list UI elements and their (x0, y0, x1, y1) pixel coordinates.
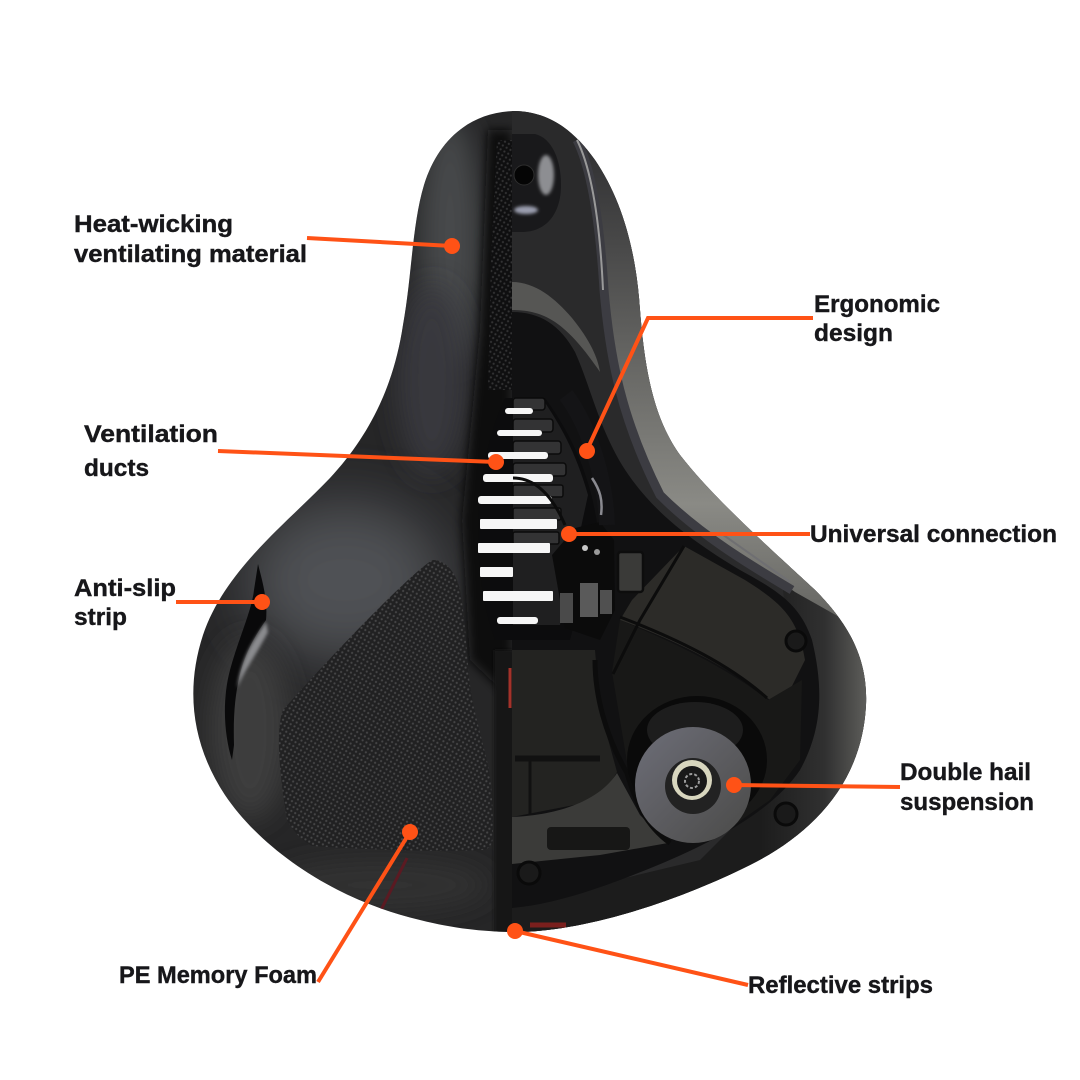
nose screw (514, 165, 534, 185)
nose highlights (514, 155, 554, 214)
callout: Ventilation ducts: ducts (84, 455, 149, 482)
callout: Ergonomic design: design (814, 320, 893, 347)
anti-slip groove (225, 564, 266, 760)
outer lower rim (512, 560, 880, 940)
neck light band (580, 142, 838, 616)
lower dark plate area (770, 686, 792, 700)
upper inner plate (620, 546, 805, 700)
memory foam panel (279, 560, 493, 851)
nut (618, 552, 643, 592)
left plate panel (512, 650, 617, 817)
callout: Double hail suspension: suspension (900, 789, 1034, 816)
callout: PE Memory Foam (119, 824, 418, 989)
callout: Double hail suspension (726, 759, 1034, 816)
ventilation ducts (478, 398, 598, 640)
callout: Anti-slip strip (74, 575, 270, 631)
callout: Universal connection: Universal connection (810, 521, 1057, 548)
left half shading (210, 115, 524, 940)
upper perforated strip (488, 140, 512, 390)
nose window (512, 134, 561, 232)
plate ribs (613, 546, 767, 698)
lower slot (547, 827, 630, 850)
anti-slip highlight (237, 622, 268, 688)
callout: Ergonomic design: Ergonomic (814, 291, 940, 318)
callout: Ventilation ducts: Ventilation (84, 421, 218, 448)
grey brace (512, 773, 668, 864)
seam strip (577, 140, 792, 590)
duct tabs (513, 398, 566, 544)
interior cavity (512, 312, 819, 908)
inner arch (512, 282, 600, 372)
callout: Heat-wicking ventilating material (74, 211, 460, 268)
saddle (193, 100, 880, 940)
callout: Universal connection (561, 521, 1057, 548)
callout: Heat-wicking ventilating material: Heat-wicking (74, 211, 233, 238)
callout: Ventilation ducts (84, 421, 504, 482)
callout: Reflective strips: Reflective strips (748, 972, 933, 999)
glossy bulge (566, 395, 607, 525)
clamp and cable (513, 395, 670, 843)
callout: Heat-wicking ventilating material: ventilating material (74, 241, 307, 268)
right half base (512, 100, 880, 940)
window ribs (515, 757, 600, 815)
callout: Double hail suspension: Double hail (900, 759, 1031, 786)
callout: PE Memory Foam: PE Memory Foam (119, 962, 317, 989)
screws (518, 631, 806, 884)
saddle body silhouette (193, 111, 866, 932)
duct white slots (478, 408, 557, 624)
callout: Ergonomic design (579, 291, 940, 459)
callout: Reflective strips (507, 923, 933, 999)
callout: Anti-slip strip: strip (74, 604, 127, 631)
red reflective marks (508, 668, 512, 708)
suspension knob (627, 696, 767, 843)
callout: Anti-slip strip: Anti-slip (74, 575, 176, 602)
